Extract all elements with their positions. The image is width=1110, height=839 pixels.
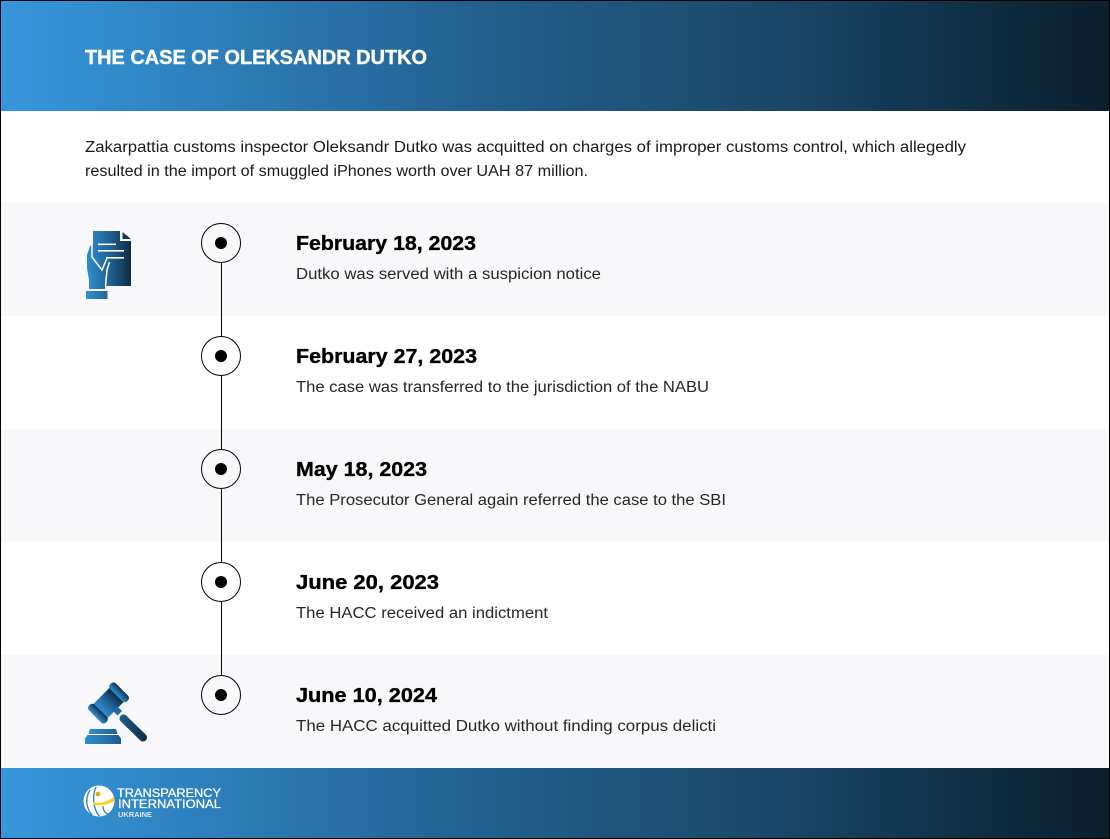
gavel head <box>87 681 130 725</box>
gavel base <box>85 729 121 744</box>
icon: hand holding document <box>86 231 131 299</box>
row background: February 18, 2023 <box>0 203 1110 316</box>
footer band <box>0 768 1110 839</box>
event 5: The HACC acquitted Dutko without finding corpus delicti <box>296 718 716 735</box>
event 2 <box>296 345 709 396</box>
icon: gavel <box>85 681 143 744</box>
logo: Transparency International Ukraine: TRANSPARENCY <box>117 786 221 800</box>
intro text: Zakarpattia customs inspector Oleksandr Dutko was acquitted on charges of improper customs control, which allegedly <box>85 139 966 156</box>
event 4: The HACC received an indictment <box>296 605 549 622</box>
event 1: February 18, 2023 <box>296 232 476 255</box>
logo emblem <box>84 786 114 816</box>
event 3: May 18, 2023 <box>296 458 427 481</box>
event 5 <box>296 684 716 735</box>
logo: Transparency International Ukraine <box>84 786 221 819</box>
event 2: February 27, 2023 <box>296 345 477 368</box>
row background: June 10, 2024 <box>0 655 1110 768</box>
logo: Transparency International Ukraine: INTERNATIONAL <box>118 797 221 811</box>
event 1: Dutko was served with a suspicion notice <box>296 266 601 283</box>
event 1 <box>296 232 601 283</box>
event 5: June 10, 2024 <box>296 684 438 707</box>
event 3 <box>296 458 726 509</box>
gavel handle <box>113 706 143 738</box>
event 4 <box>296 571 549 622</box>
event 3: The Prosecutor General again referred the case to the SBI <box>296 492 726 509</box>
header band <box>0 0 1110 111</box>
row background: May 18, 2023 <box>0 429 1110 542</box>
timeline connector line <box>220 262 222 676</box>
intro text: resulted in the import of smuggled iPhones worth over UAH 87 million. <box>85 163 588 180</box>
timeline node 3 <box>202 450 240 488</box>
timeline node 1 <box>202 224 240 262</box>
event 4: June 20, 2023 <box>296 571 439 594</box>
intro text <box>85 139 966 180</box>
title: THE CASE OF OLEKSANDR DUTKO <box>85 47 427 69</box>
timeline node 4 <box>202 562 240 602</box>
timeline node 5 <box>202 676 240 714</box>
logo: Transparency International Ukraine: UKRAINE <box>118 810 152 819</box>
timeline node 2 <box>202 336 240 376</box>
event 2: The case was transferred to the jurisdiction of the NABU <box>296 379 709 396</box>
